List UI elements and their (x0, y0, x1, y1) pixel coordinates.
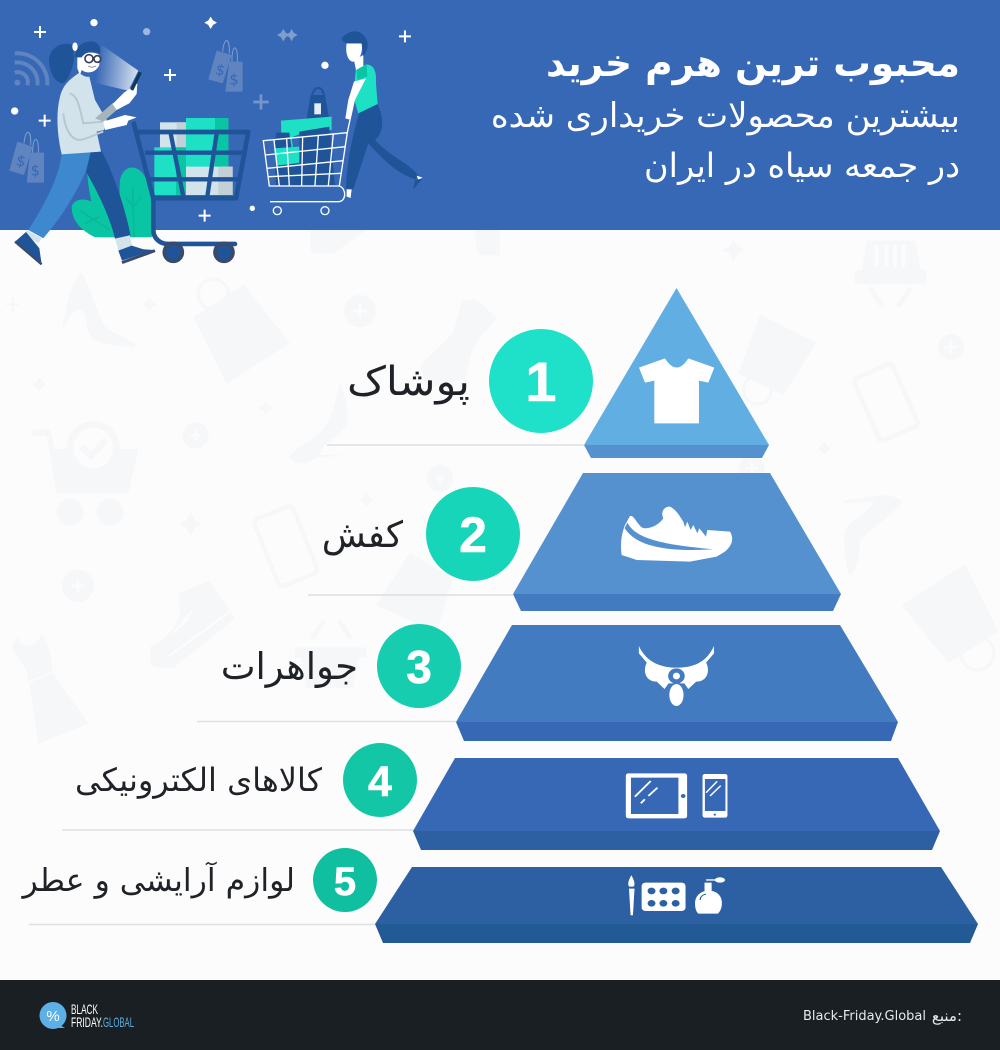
footer logo: GLOBAL (103, 1014, 134, 1030)
icon: wifi (14, 53, 47, 86)
subtitle: در جمعه سیاه در ایران (644, 146, 960, 185)
woman's shopping cart (133, 122, 248, 261)
footer bar (0, 980, 1000, 1050)
item 2 (322, 487, 520, 581)
item 3 (221, 624, 461, 708)
item 2: کفش (322, 515, 404, 556)
tier 5: cosmetics (375, 867, 978, 943)
icon: t-shirt (639, 358, 714, 423)
footer logo: % (46, 1008, 60, 1025)
decorative plus signs and dots (11, 17, 411, 222)
item 1: پوشاک (347, 359, 470, 405)
source credit: منبع: (932, 1007, 962, 1025)
tier 2: shoes (513, 473, 841, 611)
man's wire cart (263, 120, 350, 215)
footer logo: BLACK (71, 1001, 98, 1017)
icon: price tags top: $ (214, 61, 227, 80)
footer logo (40, 1001, 134, 1030)
item 5 (21, 848, 377, 912)
item 1 (347, 329, 593, 433)
item 5: لوازم آرایشی و عطر (21, 861, 295, 899)
item 1: 1 (525, 350, 557, 413)
subtitle (491, 96, 960, 185)
subtitle: بیشترین محصولات خریداری شده (491, 96, 960, 136)
footer logo: FRIDAY. (71, 1014, 103, 1030)
tier 3: jewellery (456, 625, 898, 741)
item 4: کالاهای الکترونیکی (75, 761, 323, 799)
header illustration: shoppers with carts (9, 17, 423, 264)
icon: price tags top: $ (229, 72, 239, 89)
item 3: 3 (406, 641, 432, 693)
source credit (803, 1007, 962, 1025)
tier 1: clothing (584, 288, 769, 458)
icon: sneaker (621, 507, 732, 562)
item 2: 2 (459, 507, 487, 563)
background pattern of faint shopping icons (6, 230, 998, 744)
icon: price tags left: $ (15, 152, 27, 171)
pyramid (375, 288, 978, 943)
icon: price tags left: $ (31, 163, 40, 180)
title (491, 41, 960, 185)
title: محبوب ترین هرم خرید (546, 41, 960, 86)
icon: price tags top (208, 41, 243, 92)
icon: price tags left (9, 132, 44, 183)
woman shopper (15, 42, 155, 264)
plant (72, 167, 153, 237)
man's wire cart contents (274, 88, 335, 185)
item 3: جواهرات (221, 645, 358, 688)
tier 4: electronics (413, 758, 940, 850)
item 4 (75, 743, 417, 817)
item 4: 4 (368, 758, 392, 806)
cart contents (154, 118, 233, 195)
man shopper (342, 31, 423, 198)
icon: tablet and phone (626, 773, 727, 818)
source credit: Black-Friday.Global (803, 1009, 926, 1024)
row guide lines (29, 445, 584, 924)
item 5: 5 (334, 860, 356, 904)
icon: brush, palette and perfume (628, 875, 725, 915)
icon: necklace (639, 646, 714, 708)
header band (0, 0, 1000, 230)
